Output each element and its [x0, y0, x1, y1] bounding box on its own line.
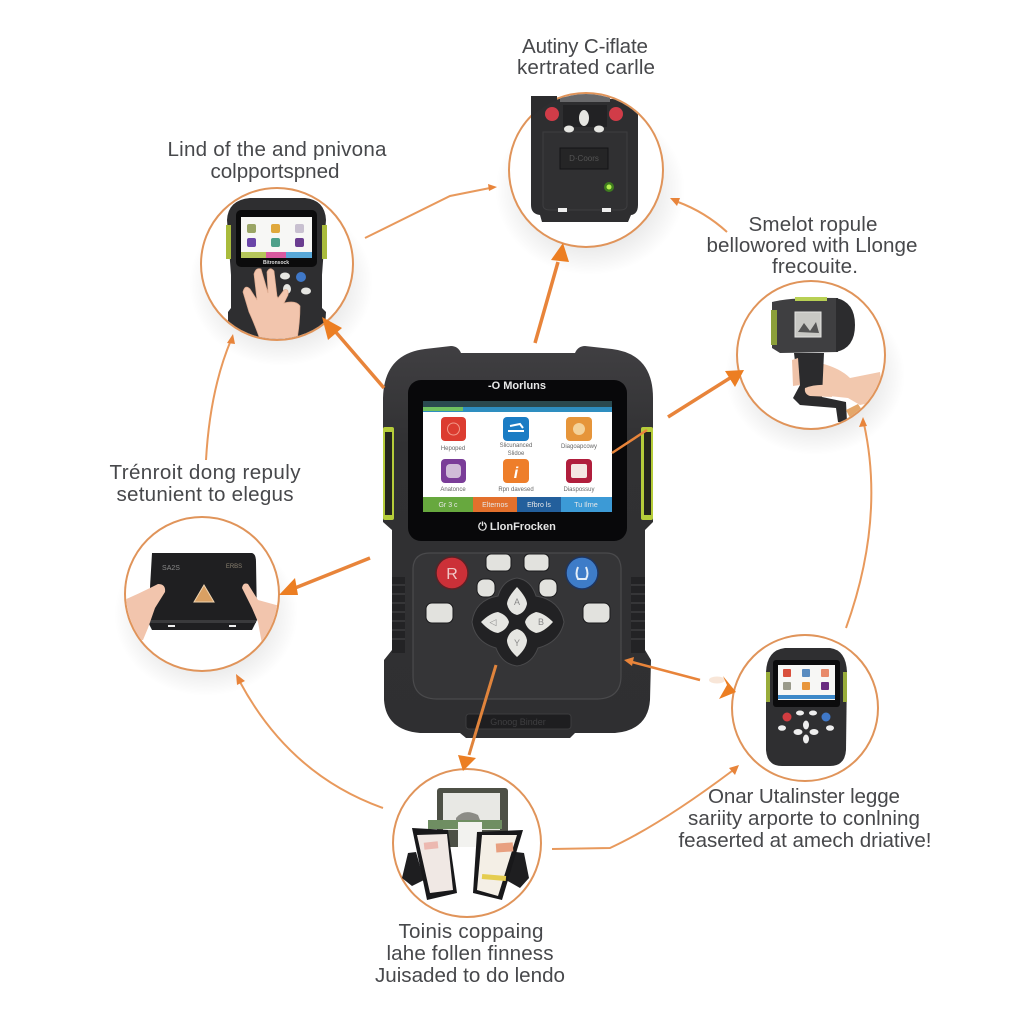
arrow: upper left to top circle [365, 184, 497, 238]
red button: R [446, 566, 458, 583]
panel: left circle, tablet held in hands: ERBS [226, 564, 242, 570]
arrow: lower right to device [624, 657, 700, 680]
heading: upper left caption [168, 138, 387, 183]
heading: left caption [110, 461, 301, 506]
device body [383, 346, 653, 738]
bottom tab bar [423, 497, 612, 512]
icon: forearm and hand [822, 364, 880, 405]
left yellow side strip [383, 427, 394, 520]
icon captions [440, 443, 597, 493]
arrow: toward lower right circle [709, 676, 736, 699]
heading: bottom caption: lahe follen finness [386, 942, 554, 965]
icon: right tablet [473, 830, 523, 900]
heading: left caption: setunient to elegus [116, 483, 294, 506]
icon: purple app [441, 459, 466, 483]
icon captions: Diagoapcowy [561, 444, 597, 450]
arrow: device to right circle [668, 370, 744, 417]
arrow: device to left circle [279, 558, 370, 595]
embossed base label [466, 714, 571, 729]
icon: orange info app [503, 459, 529, 483]
icon: blue app [503, 417, 529, 441]
screen display: i [514, 465, 519, 482]
panel: right circle, handheld unit [737, 281, 885, 429]
d-pad: ◁ [490, 617, 497, 627]
heading: bottom caption: Juisaded to do lendo [375, 964, 565, 987]
bottom tab bar: Tu Ilrne [574, 502, 598, 509]
arrow: device to bottom circle [458, 665, 496, 771]
icon: pistol grip [793, 353, 847, 422]
brand logo: -O Morluns [488, 380, 546, 392]
panel: bottom circle, monitor and two tablets [393, 769, 541, 917]
panel: top circle, rear of device: D·Coors [569, 154, 599, 163]
d-pad: B [538, 617, 544, 627]
heading: bottom caption [375, 920, 565, 987]
screen bezel [408, 380, 627, 541]
icon captions: Diaspossuy [563, 487, 595, 493]
icon: rear monitor [437, 788, 508, 847]
keypad buttons [426, 554, 610, 623]
arrow: left caption to upper left circle [206, 334, 235, 460]
blue button [566, 557, 598, 589]
d-pad: A [514, 597, 520, 607]
icon: hand on keypad [243, 269, 300, 345]
icon: warning triangle [194, 585, 214, 602]
screen display [423, 401, 612, 512]
icon captions: Rpn davesed [498, 487, 534, 493]
heading: top caption: Autiny C-iflate [522, 35, 648, 58]
panel: upper left circle, device with hand [201, 188, 353, 345]
arrow: device to upper left circle [322, 317, 384, 388]
bottom tab bar: Efbro ls [527, 502, 551, 509]
panel: left circle, tablet held in hands: SA2S [162, 565, 180, 572]
arrow: device to top circle [535, 243, 569, 343]
heading: lower right caption [678, 785, 932, 852]
heading: top caption: kertrated carlle [517, 56, 655, 79]
icon: orange app [566, 417, 592, 441]
red button [436, 557, 468, 589]
heading: bottom caption: Toinis coppaing [398, 920, 544, 943]
arrow: screen pointer line [612, 430, 647, 453]
arrow: right caption to top circle [670, 198, 727, 232]
right yellow side strip [641, 427, 653, 520]
bottom tab bar: Gr 3 c [438, 502, 458, 509]
icon: fingers [792, 358, 800, 386]
soft shadows behind circles [114, 105, 905, 696]
heading: lower right caption: feaserted at amech driative! [678, 829, 932, 852]
panel: upper left circle, device with hand: Bitronsock [263, 260, 289, 266]
heading: right caption: Smelot ropule [748, 213, 878, 236]
heading: upper left caption: Lind of the and pnivona [168, 138, 387, 161]
heading: lower right caption: Onar Utalinster legge [708, 785, 900, 808]
panel: main scanner device [383, 346, 653, 738]
icon captions: Slicunanced [500, 443, 532, 449]
panel: top circle, rear of device [509, 93, 663, 247]
d-pad: Y [514, 638, 520, 648]
icon: right hand [242, 584, 277, 641]
heading: upper left caption: colpportspned [210, 160, 340, 183]
heading: right caption: frecouite. [772, 255, 858, 278]
heading: right caption [706, 213, 918, 278]
icon: thumb [805, 385, 833, 397]
heading: top caption [517, 35, 655, 79]
icon: left tablet [412, 828, 457, 900]
d-pad [472, 578, 564, 666]
arrow: bottom left curve to left circle [236, 674, 383, 808]
icon captions: Anatonce [440, 487, 466, 493]
icon: side cables [402, 852, 529, 888]
bottom tab bar: Elternos [482, 502, 508, 509]
icon captions: Hepoped [441, 446, 465, 452]
icon: red app [441, 417, 466, 441]
arrow: bottom circle to lower right circle [552, 765, 739, 849]
heading: right caption: bellowored with Llonge [706, 234, 918, 257]
arrow: lower right to right circle [846, 417, 871, 628]
icon: maroon app [566, 459, 592, 483]
heading: lower right caption: sariity arporte to conlning [688, 807, 920, 830]
device brand label: ⏻ LlonFrocken [478, 520, 556, 533]
heading: left caption: Trénroit dong repuly [110, 461, 301, 484]
panel: left circle, tablet held in hands [124, 517, 280, 671]
panel: lower right circle, small device [732, 635, 878, 781]
icon: left hand [124, 584, 165, 640]
grip ribs [392, 577, 645, 653]
embossed base label: Gnoog Binder [490, 717, 546, 727]
icon captions: Slidoe [508, 451, 525, 457]
